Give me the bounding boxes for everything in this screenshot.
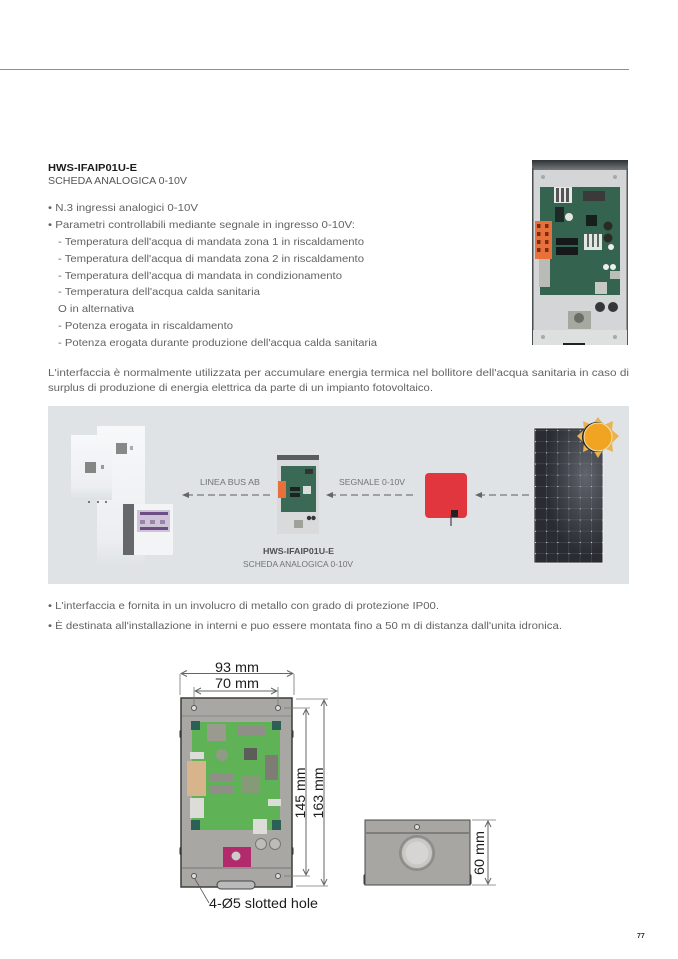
dimensions: front view: 70 mm [215,675,259,691]
panel: system diagram [48,406,629,584]
board caption: HWS-IFAIP01U-E [263,546,334,556]
icon: hydronic units and controller [71,426,173,568]
heading [48,162,187,187]
board caption [243,546,353,569]
icon: red inverter [425,473,467,526]
icon: analog board [277,455,319,534]
feature list: • N.3 ingressi analogici 0-10V [48,203,198,214]
icon: solar panel [534,428,603,563]
dimensions: front view: 93 mm [215,659,259,675]
description paragraph [48,368,629,394]
heading: SCHEDA ANALOGICA 0-10V [48,175,187,187]
feature list: - Temperatura dell'acqua di mandata zona 1 in riscaldamento [58,237,364,248]
feature list [48,203,377,349]
feature list: - Temperatura dell'acqua di mandata zona 2 in riscaldamento [58,254,364,265]
board heat sink top [554,187,572,203]
arrow: bus line [182,492,270,498]
feature list: - Temperatura dell'acqua calda sanitaria [58,287,260,298]
page number: 77 [637,933,645,940]
description paragraph: surplus di produzione di energia elettrica da parte di un impianto fotovoltaico. [48,383,433,394]
feature list: • Parametri controllabili mediante segnale in ingresso 0-10V: [48,220,355,231]
heading: HWS-IFAIP01U-E [48,162,137,174]
label: segnale: SEGNALE 0-10V [339,477,405,487]
dimensions: front view: 4-Ø5 slotted hole [209,895,318,911]
label: linea bus: LINEA BUS AB [200,477,260,487]
top rule [0,68,629,70]
feature list: - Temperatura dell'acqua di mandata in condizionamento [58,271,342,282]
dimensions: side view: 60 mm [471,831,487,875]
description paragraph: L'interfaccia è normalmente utilizzata per accumulare energia termica nel bollitore dell'acqua sanitaria in caso di [48,368,629,379]
dimensions: front view: 163 mm [310,768,326,818]
installation notes: • È destinata all'installazione in interni e puo essere montata fino a 50 m di distanza dall'unita idronica. [48,619,562,632]
dimensions: front view [180,659,328,911]
installation notes: • L'interfaccia e fornita in un involucro di metallo con grado di protezione IP00. [48,601,439,612]
technical drawing: side view [364,820,472,885]
feature list: - Potenza erogata durante produzione dell'acqua calda sanitaria [58,338,377,349]
dimensions: front view: 145 mm [292,768,308,818]
product photo: analog board [532,160,628,345]
dimensions: side view [471,820,496,885]
arrow: solar line [475,492,529,498]
installation notes [48,601,562,632]
technical drawing: front view [180,698,294,889]
feature list: - Potenza erogata in riscaldamento [58,321,233,332]
feature list: O in alternativa [58,304,134,315]
icon: sun [577,417,619,458]
arrow: signal line [326,492,413,498]
board caption: SCHEDA ANALOGICA 0-10V [243,559,353,569]
